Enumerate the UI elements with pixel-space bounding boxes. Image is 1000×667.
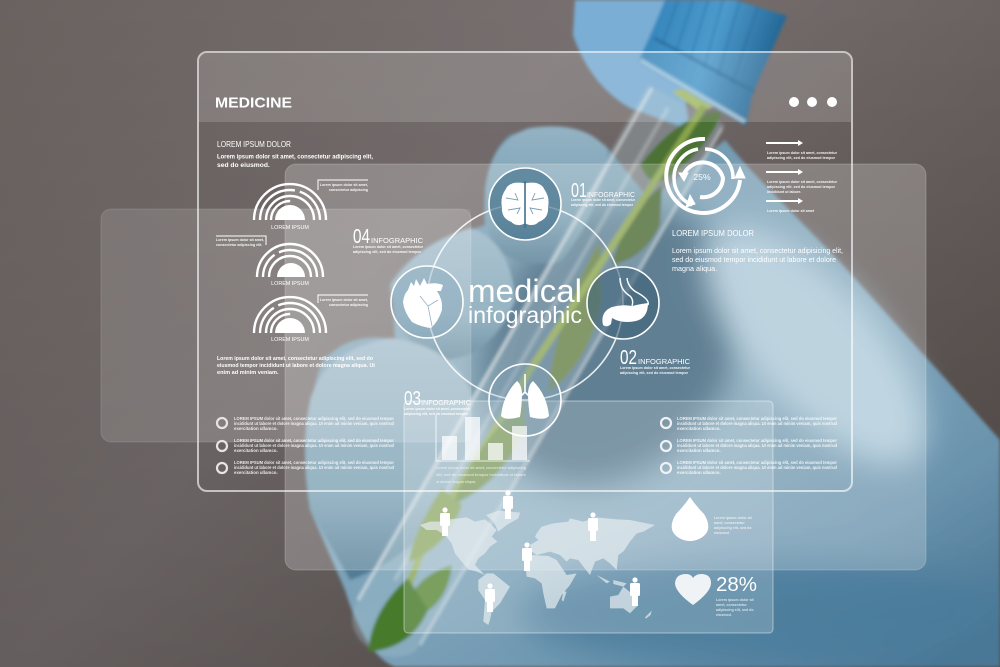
label: 02 infographic: adipiscing elit, sed do eiusmod tempor [620,371,689,375]
chart: semicircle 2 [257,244,323,277]
list: left bullets: incididunt ut labore et dolore magna aliqua. Ut enim ad minim veniam, quis nostrud [234,421,394,426]
arrows with captions: Lorem ipsum dolor sit amet, consectetur [767,180,838,184]
list: right bullets: incididunt ut labore et dolore magna aliqua. Ut enim ad minim veniam, quis nostrud [677,465,837,470]
label: 04 infographic: 04 [353,226,370,248]
label: 04 infographic: INFOGRAPHIC [371,236,424,245]
bar chart: et dolore magna aliqua. [436,480,476,484]
text block: right: magna aliqua. [672,264,717,273]
glove: fingers [485,126,608,264]
text block: top left: sed do eiusmod. [217,162,270,169]
list: right bullets: incididunt ut labore et dolore magna aliqua. Ut enim ad minim veniam, quis nostrud [677,421,837,426]
label: 02 infographic: Lorem ipsum dolor sit amet, consectetur [620,366,691,370]
text: heart caption: Lorem ipsum dolor sit [716,598,755,602]
window dots [789,97,837,107]
chart labels: LOREM IPSUM [271,225,309,231]
label: 04 infographic: Lorem ipsum dolor sit amet, consectetur [353,245,424,249]
list: left bullets: LOREM IPSUM dolor sit amet, consectetur adipiscing elit, sed do eiusmod tempor [234,438,394,443]
list: left bullets: exercitation ullamco. [234,426,278,431]
panel: medicine window [198,52,852,491]
label: 02 infographic [620,347,691,375]
label: 02 infographic: INFOGRAPHIC [638,357,691,366]
panel: lower panel [404,401,773,633]
list: right bullets: LOREM IPSUM dolor sit amet, consectetur adipiscing elit, sed do eiusmod tempor [677,416,837,421]
list: right bullets: exercitation ullamco. [677,448,721,453]
text block: right: LOREM IPSUM DOLOR [672,228,754,238]
list: left bullets: incididunt ut labore et dolore magna aliqua. Ut enim ad minim veniam, quis nostrud [234,443,394,448]
heading: medicine: MEDICINE [215,94,292,112]
list: right bullets: LOREM IPSUM dolor sit amet, consectetur adipiscing elit, sed do eiusmod tempor [677,438,837,443]
chart labels: LOREM IPSUM [271,337,309,343]
label: 04 infographic [353,226,424,254]
list: left bullets: exercitation ullamco. [234,470,278,475]
callouts for semicircle charts [216,180,368,307]
callouts for semicircle charts: Lorem ipsum dolor sit amet, [320,183,368,187]
text block: lower left paragraph: enim ad minim veniam. [217,370,279,376]
label: 01 infographic: 01 [571,180,587,202]
thumb highlight [669,192,961,498]
list: left bullets [217,416,394,475]
list: right bullets [661,416,837,475]
callouts for semicircle charts: consectetur adipiscing elit. [216,243,262,247]
label: 04 infographic: adipiscing elit, sed do eiusmod tempor [353,250,422,254]
text block: lower left paragraph: Lorem ipsum dolor sit amet, consectetur adipiscing elit, sed do [217,356,374,362]
panel: back panel left [101,209,471,442]
palm shadow [426,153,794,537]
label: 03 infographic: 03 [404,388,421,410]
window header band [199,53,851,122]
text block: right: sed do eiusmod tempor incididunt ut labore et dolore [672,255,836,264]
arrows with captions: Lorem ipsum dolor sit amet, consectetur [767,151,838,155]
glove: lower palm shade [520,558,1000,666]
callouts for semicircle charts: consectetur adipiscing [329,188,368,192]
callouts for semicircle charts: Lorem ipsum dolor sit amet, [320,298,368,302]
list: right bullets: exercitation ullamco. [677,470,721,475]
chart labels [271,225,309,343]
text block: lower left paragraph: eiusmod tempor incididunt ut labore et dolore magna aliqua. Ut [217,363,375,369]
list: right bullets: incididunt ut labore et dolore magna aliqua. Ut enim ad minim veniam, quis nostrud [677,443,837,448]
text block: lower left paragraph [217,356,375,376]
glove: upper finger behind the cap [573,0,690,130]
text: drop caption [714,516,753,535]
world map [420,511,655,625]
plant leaves [640,112,722,182]
title: medical infographic [468,273,582,328]
text block: right [672,228,843,273]
title: medical infographic: medical [468,273,582,309]
arrows with captions: adipiscing elit, sed do eiusmod tempor [767,156,836,160]
chart: semicircle 3 [254,297,326,333]
text: drop caption: amet, consectetur [714,521,745,525]
text: heart caption: eiusmod. [716,613,732,617]
test tube [352,85,725,657]
chart labels: LOREM IPSUM [271,281,309,287]
map: people markers [440,490,640,612]
callouts for semicircle charts: consectetur adipiscing [329,303,368,307]
diagram: organ ring [391,168,659,436]
text: drop caption: adipiscing elit, sed do [714,526,752,530]
list: right bullets: exercitation ullamco. [677,426,721,431]
bar chart: Lorem ipsum dolor sit amet, consectetur adipiscing [436,466,526,470]
list: left bullets: LOREM IPSUM dolor sit amet, consectetur adipiscing elit, sed do eiusmod tempor [234,416,394,421]
text block: top left [217,140,373,169]
icon: circular arrows 25%: 25% [693,172,711,182]
chart: semicircle 1 [254,184,326,220]
bar chart: elit, sed do eiusmod tempor incididunt ut labore [436,473,526,477]
text: heart caption: amet, consectetur [716,603,747,607]
label: 03 infographic [404,388,472,416]
text block: top left: Lorem ipsum dolor sit amet, consectetur adipiscing elit, [217,154,373,160]
panel: overlap brightening inside window [199,209,471,442]
icon: water drop [672,497,708,541]
icon: stomach [587,267,659,339]
cap [638,0,787,126]
panel: middle panel [285,164,926,570]
title: medical infographic: infographic [468,302,582,328]
label: 03 infographic: adipiscing elit, sed do eiusmod tempor [404,412,469,416]
text: heart caption: adipiscing elit, sed do [716,608,754,612]
stat: 28%: 28% [716,573,757,596]
glove: palm and thumb [306,128,1000,667]
bar chart [436,415,530,484]
label: 01 infographic: INFOGRAPHIC [587,190,636,199]
list: left bullets: LOREM IPSUM dolor sit amet, consectetur adipiscing elit, sed do eiusmod tempor [234,460,394,465]
label: 03 infographic: Lorem ipsum dolor sit amet, consectetur [404,407,471,411]
arrows with captions: Lorem ipsum dolor sit amet [767,209,815,213]
text: drop caption: Lorem ipsum dolor sit [714,516,753,520]
callouts for semicircle charts: Lorem ipsum dolor sit amet, [216,238,264,242]
text block: right: Lorem ipsum dolor sit amet, consectetur adipisicing elit, [672,246,843,255]
text block: top left: LOREM IPSUM DOLOR [217,140,291,149]
arrows with captions: adipiscing elit, sed do eiusmod tempor [767,185,836,189]
label: 01 infographic: adipiscing elit, sed do eiusmod tempor [571,203,634,207]
label: 01 infographic: Lorem ipsum dolor sit amet, consectetur [571,198,636,202]
text: drop caption: eiusmod. [714,531,730,535]
icon: heart [391,266,463,338]
icon: circular arrows 25% [666,139,745,213]
text: heart caption [716,598,755,617]
label: 02 infographic: 02 [620,347,637,369]
label: 01 infographic [571,180,636,207]
photo: gloved hand holding a test tube [305,0,1000,667]
label: 03 infographic: INFOGRAPHIC [421,398,472,407]
icon: heart stat [675,574,711,605]
arrows with captions [766,140,838,213]
arrows with captions: incididunt ut labore. [767,190,801,194]
list: left bullets: exercitation ullamco. [234,448,278,453]
list: right bullets: LOREM IPSUM dolor sit amet, consectetur adipiscing elit, sed do eiusmod tempor [677,460,837,465]
list: left bullets: incididunt ut labore et dolore magna aliqua. Ut enim ad minim veniam, quis nostrud [234,465,394,470]
icon: lungs [489,364,561,436]
icon: brain [489,168,561,240]
